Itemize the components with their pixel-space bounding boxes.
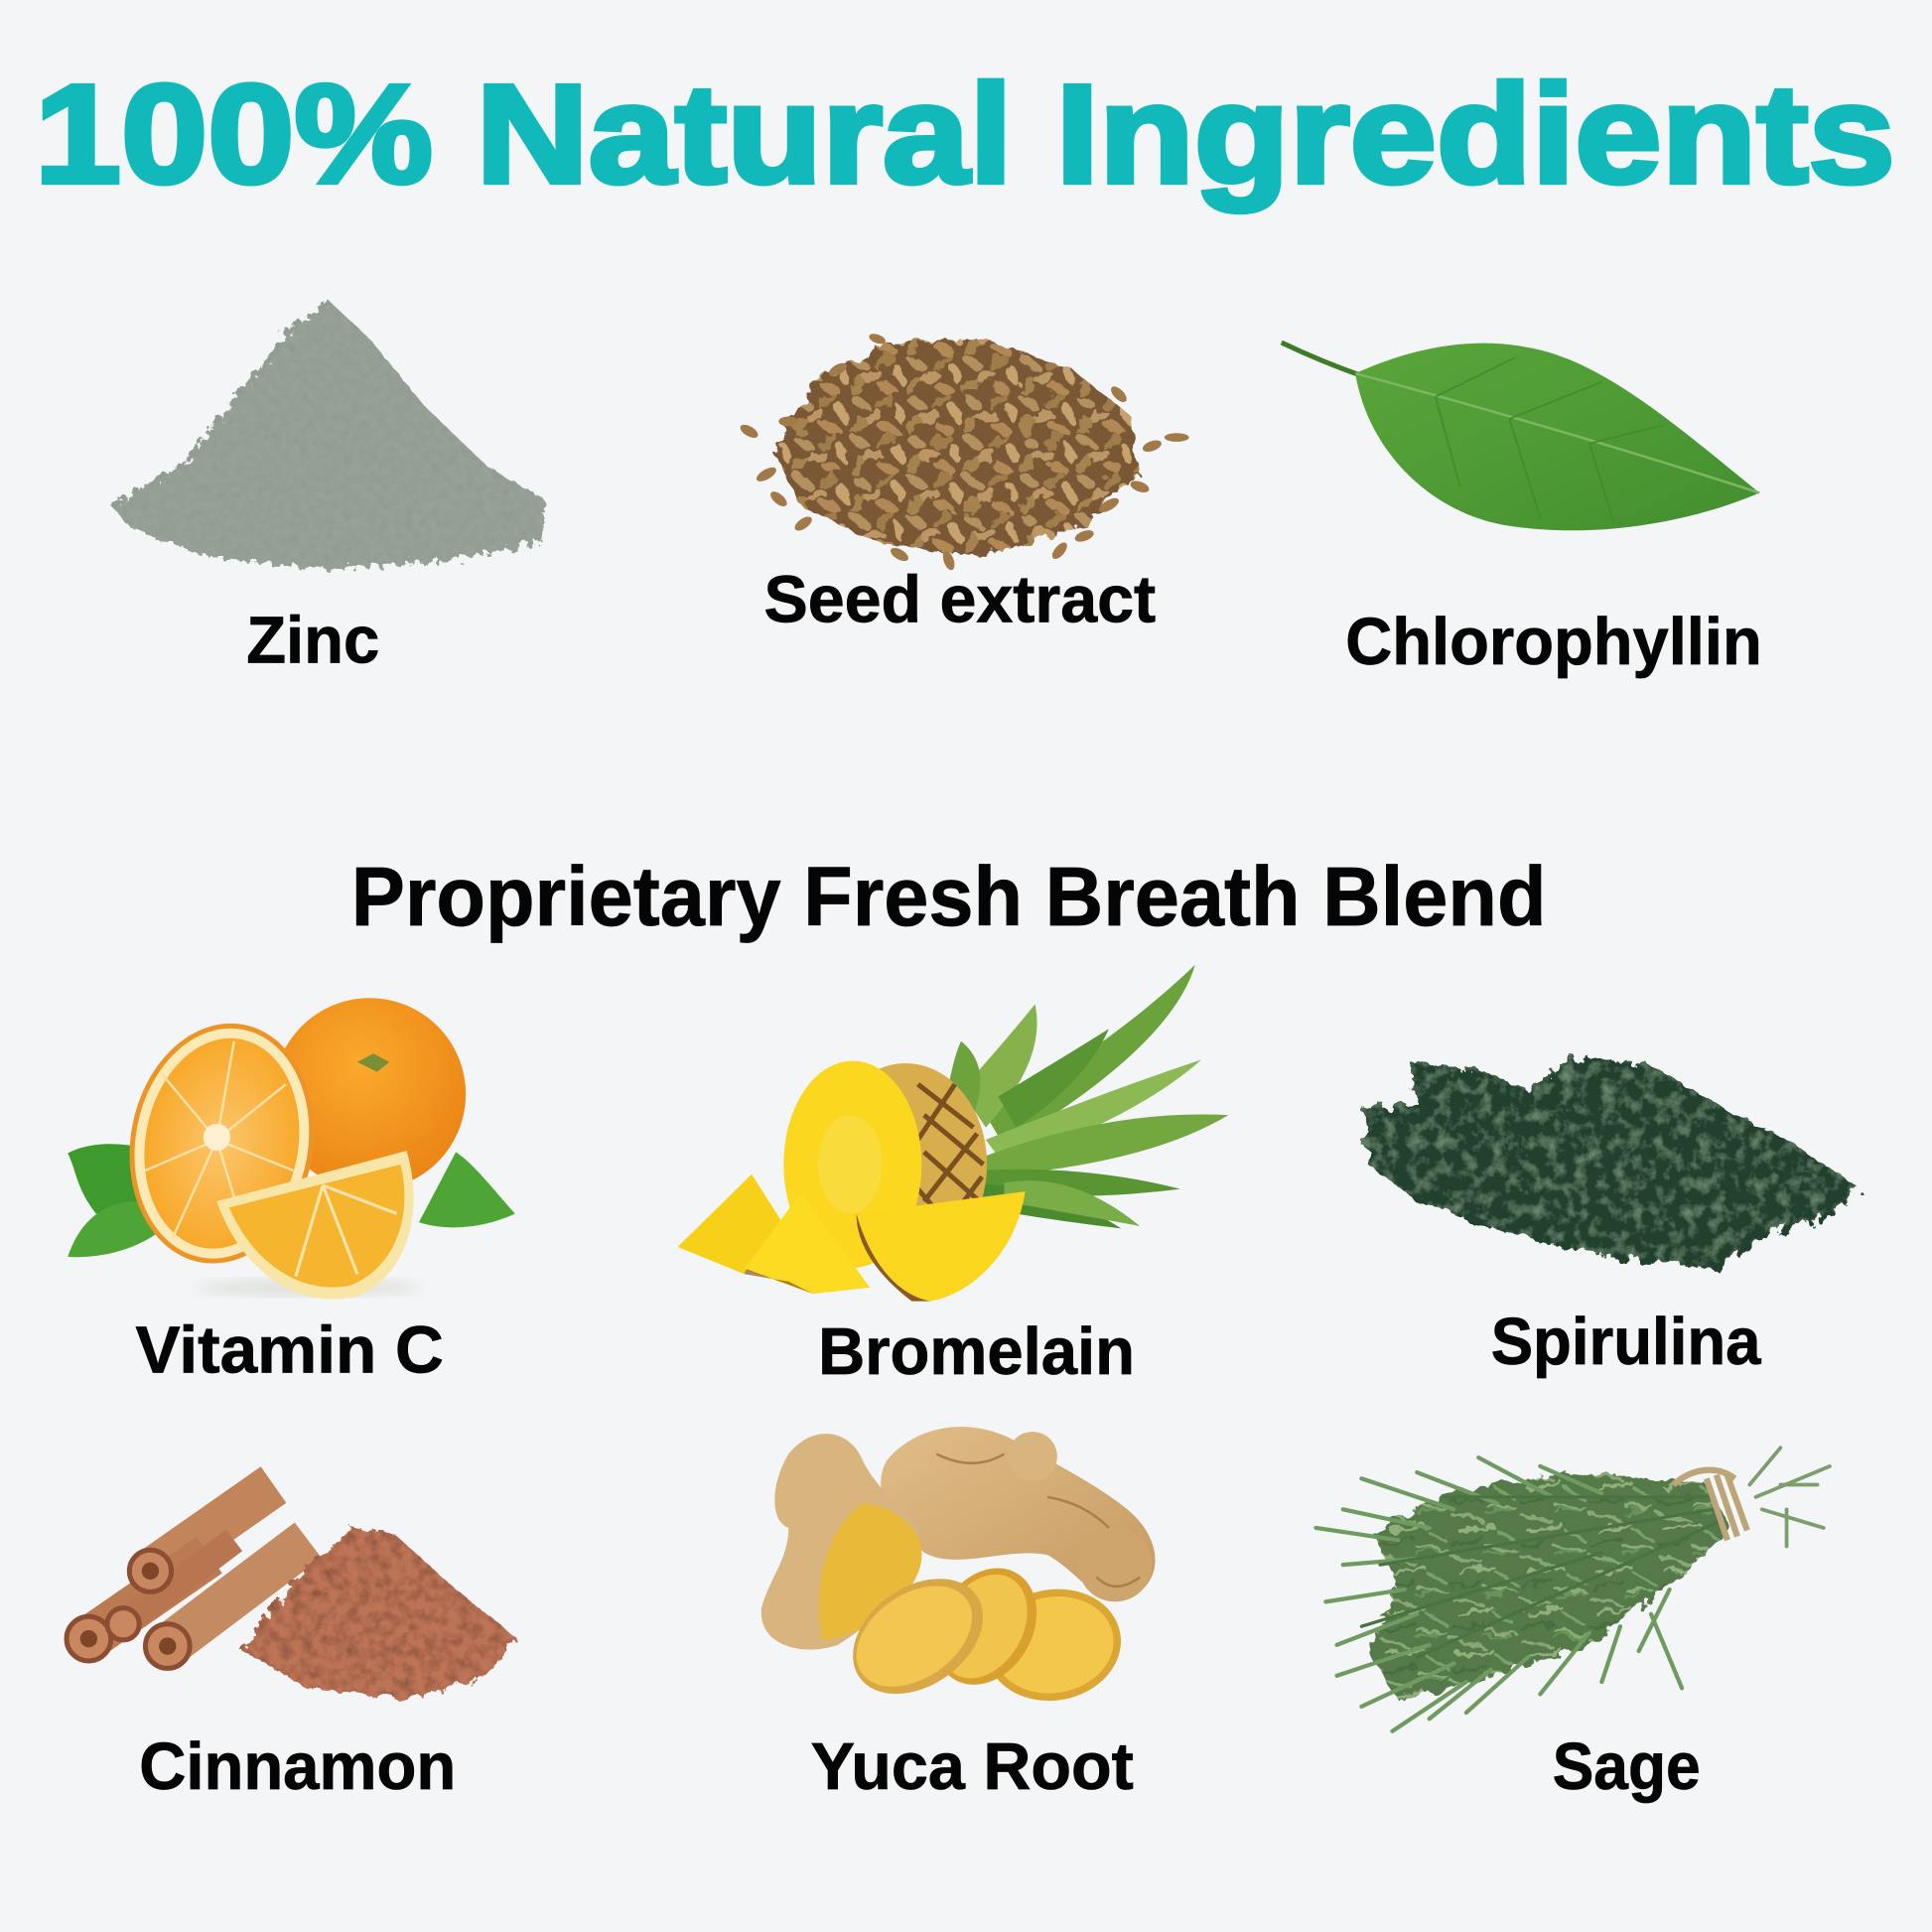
ingredient: seed extract bbox=[738, 332, 1189, 637]
icon: green leaf bbox=[1282, 343, 1759, 530]
ingredient: yuca root bbox=[761, 1427, 1156, 1804]
label: seed extract: Seed extract bbox=[763, 563, 1156, 637]
label: bromelain: Bromelain bbox=[818, 1314, 1135, 1389]
ingredient: sage bbox=[1315, 1448, 1830, 1804]
ingredient: zinc bbox=[111, 302, 545, 678]
ingredient: bromelain bbox=[678, 965, 1228, 1389]
icon: zinc powder pile bbox=[111, 302, 545, 569]
label: zinc: Zinc bbox=[246, 604, 379, 678]
twine tie bbox=[1673, 1470, 1747, 1540]
ingredient: vitamin c bbox=[68, 998, 515, 1388]
orange stem bbox=[357, 1053, 389, 1072]
label: cinnamon: Cinnamon bbox=[139, 1729, 456, 1804]
label: spirulina: Spirulina bbox=[1491, 1305, 1761, 1379]
icon: root and slices bbox=[761, 1427, 1156, 1718]
label: chlorophyllin: Chlorophyllin bbox=[1345, 605, 1762, 679]
section heading: Proprietary Fresh Breath Blend bbox=[351, 850, 1547, 943]
icon: oranges bbox=[68, 998, 515, 1300]
icon: herb bundle bbox=[1315, 1448, 1830, 1731]
label: sage: Sage bbox=[1553, 1729, 1701, 1804]
ingredient: cinnamon bbox=[67, 1484, 517, 1804]
icon: cinnamon sticks and powder bbox=[67, 1484, 517, 1701]
ingredient: chlorophyllin bbox=[1282, 343, 1762, 679]
icon: seed pile bbox=[738, 332, 1189, 572]
icon: spirulina powder bbox=[1365, 1053, 1861, 1269]
ingredient: spirulina bbox=[1365, 1053, 1861, 1379]
title: 100% Natural Ingredients bbox=[35, 56, 1895, 212]
label: vitamin c: Vitamin C bbox=[136, 1313, 444, 1388]
label: yuca root: Yuca Root bbox=[811, 1729, 1134, 1804]
icon: pineapple bbox=[678, 965, 1228, 1302]
